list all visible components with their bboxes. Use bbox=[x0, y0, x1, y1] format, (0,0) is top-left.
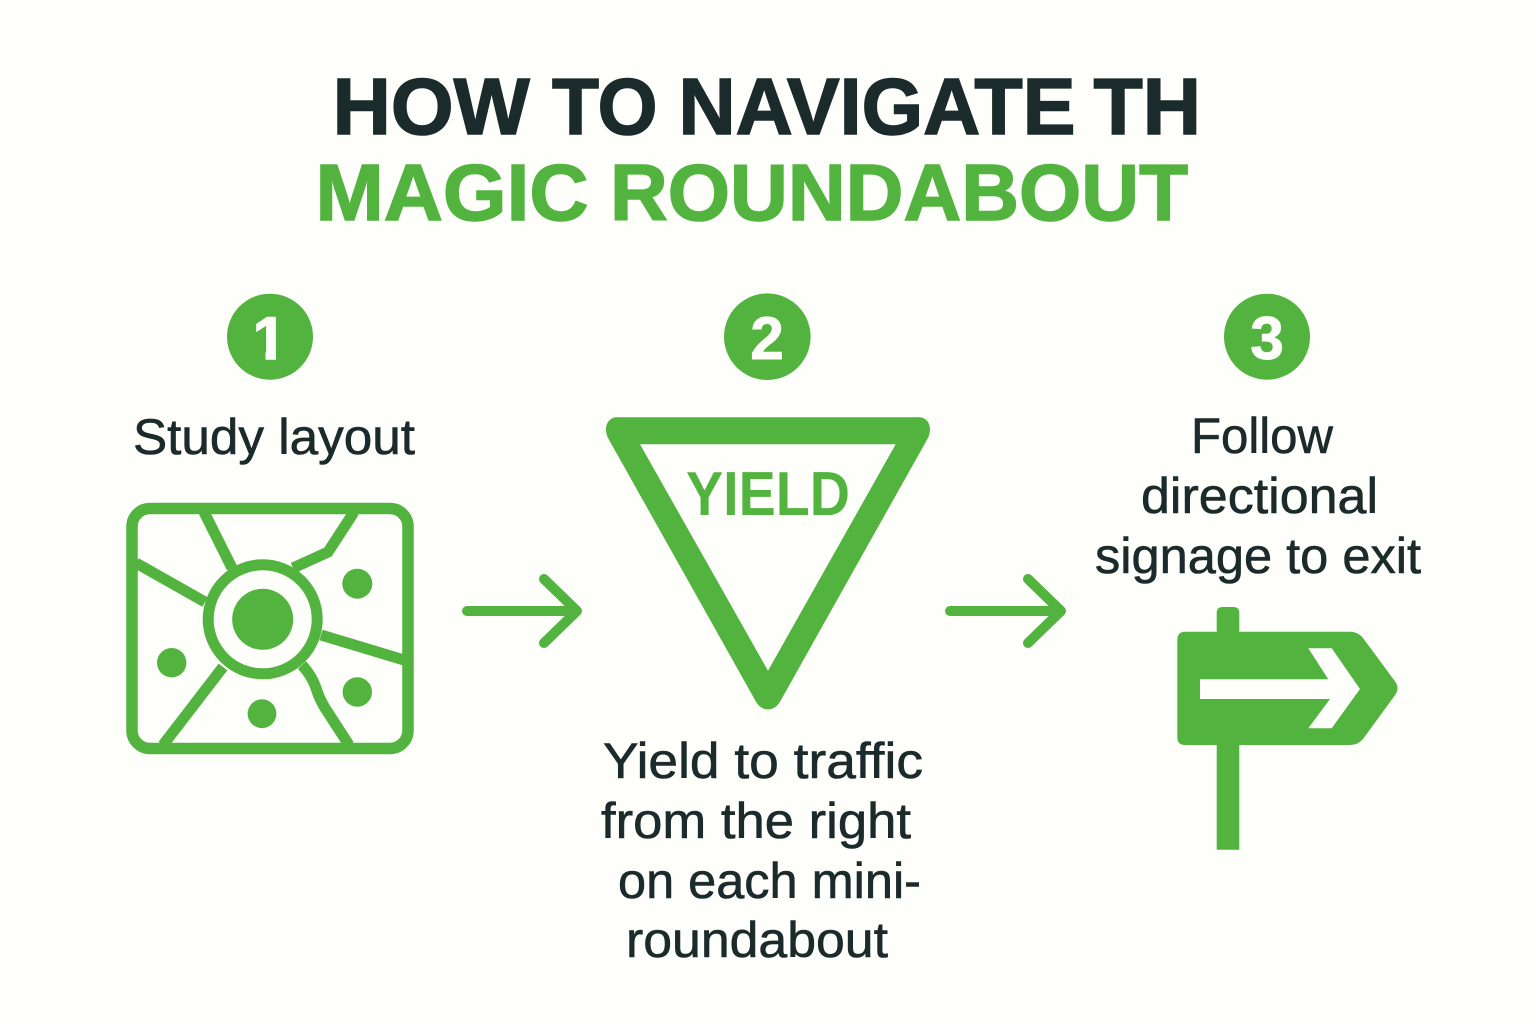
step 2 label: on each mini- bbox=[618, 853, 921, 909]
title: TO bbox=[552, 62, 658, 151]
title: HOW bbox=[333, 62, 530, 151]
title: MAGIC bbox=[316, 148, 588, 237]
step 2 label: Yield to traffic bbox=[603, 733, 923, 789]
title: TH bbox=[1094, 62, 1201, 151]
title: NAVIGATE bbox=[678, 62, 1076, 151]
step 2 label: roundabout bbox=[626, 912, 888, 968]
step 3 label: directional bbox=[1141, 468, 1378, 524]
step 2 number badge: 2 bbox=[750, 305, 784, 372]
step 3 label: Follow bbox=[1191, 408, 1334, 464]
step 3 number badge: 3 bbox=[1250, 305, 1284, 372]
step 3 label bbox=[1095, 408, 1421, 584]
icon: directional signpost bbox=[1177, 607, 1398, 850]
step 3 label: signage to exit bbox=[1095, 528, 1421, 584]
icon: yield sign bbox=[606, 417, 930, 709]
step 1 label: Study layout bbox=[133, 409, 415, 465]
icon: yield sign: YIELD bbox=[686, 460, 850, 529]
step 1 number badge bbox=[227, 294, 313, 380]
title bbox=[316, 62, 1201, 237]
arrow: step 2 to step 3 bbox=[950, 579, 1061, 643]
step 3 number badge bbox=[1224, 294, 1310, 380]
arrow: step 1 to step 2 bbox=[467, 579, 577, 643]
title: ROUNDABOUT bbox=[610, 148, 1188, 237]
step 2 label: from the right bbox=[601, 793, 911, 849]
step 2 number badge bbox=[724, 293, 811, 380]
step 1 number badge: 1 bbox=[253, 305, 286, 372]
icon: roundabout map bbox=[132, 508, 408, 748]
step 2 label bbox=[601, 733, 923, 968]
